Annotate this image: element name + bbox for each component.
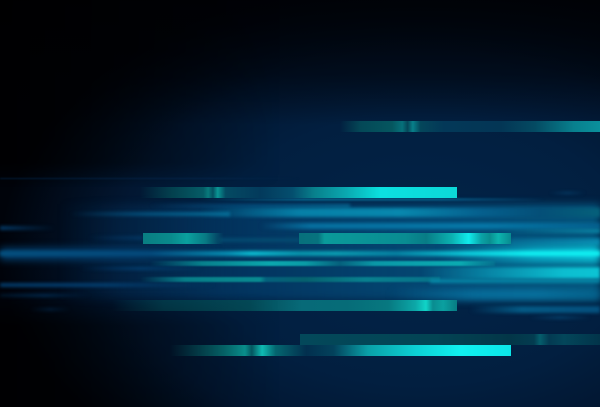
- bar: thin y262: [150, 261, 495, 266]
- wisp: y318: [530, 316, 590, 319]
- streak: central long: [0, 251, 600, 256]
- bar: middle left: [143, 233, 223, 244]
- streak: left y285: [0, 283, 215, 287]
- left and bottom-left dark vignette: [0, 93, 264, 407]
- streak: right y280: [430, 279, 600, 283]
- bar: y279: [140, 277, 440, 282]
- streak: y268: [80, 267, 200, 270]
- streak: right y241: [511, 238, 600, 245]
- glow: central soft band: [60, 204, 600, 300]
- bar: middle right: [299, 233, 511, 244]
- thin top streak: [0, 178, 300, 179]
- wisp: y309: [470, 306, 600, 313]
- streak: right y270: [420, 267, 600, 279]
- streak: left y238: [88, 236, 143, 240]
- streak: y225: [260, 223, 600, 229]
- bar: upper middle: [140, 187, 457, 198]
- streak: y205: [150, 204, 350, 208]
- streak: right y231: [500, 229, 600, 233]
- wisp: left y296: [0, 294, 90, 297]
- wisp: top right y193: [550, 192, 585, 194]
- bar: top right: [340, 121, 600, 132]
- streak: y293: [390, 290, 600, 299]
- wisp: left y310: [30, 308, 70, 311]
- top dark fade: [0, 0, 600, 125]
- bar: lower middle: [112, 300, 457, 311]
- bar: bottom dim: [300, 334, 600, 345]
- streak: left wide y248: [0, 248, 220, 260]
- streak: upper wide: [200, 208, 600, 217]
- streak: y213 left: [70, 212, 230, 216]
- streak: left y228: [0, 226, 55, 230]
- bar: bottom bright: [170, 345, 511, 356]
- streak: thin under upper bar: [200, 198, 545, 201]
- glow: bright right bloom: [440, 245, 600, 263]
- streak: mid y240: [220, 238, 300, 242]
